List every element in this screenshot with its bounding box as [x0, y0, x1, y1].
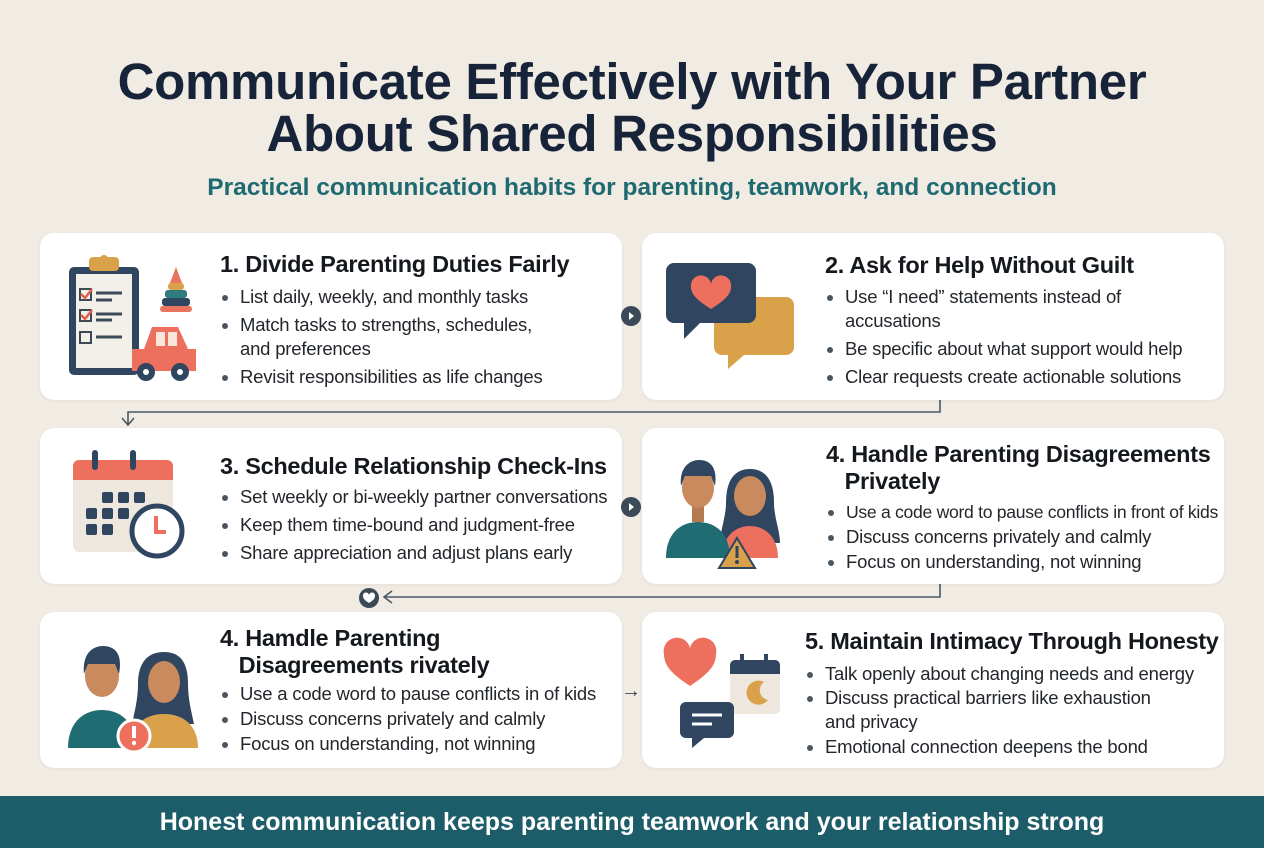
arrow: to panel 5: → — [621, 680, 641, 702]
heading: 2. Ask for Help Without Guilt — [825, 252, 1134, 278]
subtitle: Practical communication habits for parenting, teamwork, and connection — [207, 174, 1057, 201]
icon: heart connector — [359, 588, 379, 608]
panel: 5 intimacy — [642, 612, 1224, 768]
bullets: Use a code word to pause conflicts in of kids — [240, 683, 596, 704]
bullets: and preferences — [240, 338, 371, 359]
bullets: Use “I need” statements instead of — [845, 286, 1121, 307]
bullets: accusations — [845, 310, 940, 331]
icon: speech bubbles — [666, 263, 794, 369]
bullets: Focus on understanding, not winning — [240, 733, 535, 754]
icon: heart, calendar moon, chat — [664, 638, 780, 748]
panel: 2 ask for help — [642, 233, 1224, 400]
bullets — [828, 502, 1218, 572]
bullets: Share appreciation and adjust plans early — [240, 542, 572, 563]
bullets: Keep them time-bound and judgment-free — [240, 514, 575, 535]
bullets: Revisit responsibilities as life changes — [240, 366, 543, 387]
heading: 4. Hamdle Parenting — [220, 625, 440, 651]
bullets: Discuss practical barriers like exhaustion — [825, 687, 1151, 708]
panel: 4 disagreements privately — [642, 428, 1224, 584]
bullets — [827, 286, 1182, 387]
title — [118, 53, 1146, 162]
bullets: Use a code word to pause conflicts in front of kids — [846, 502, 1218, 522]
bullets: and privacy — [825, 711, 917, 732]
bullets — [807, 663, 1194, 757]
title: About Shared Responsibilities — [267, 105, 997, 162]
heading: 3. Schedule Relationship Check-Ins — [220, 453, 607, 479]
heading: 1. Divide Parenting Duties Fairly — [220, 251, 569, 277]
heading: 4. Handle Parenting Disagreements — [826, 441, 1211, 467]
panel: 1 divide duties — [40, 233, 622, 400]
bullets: Set weekly or bi-weekly partner conversations — [240, 486, 607, 507]
icon: clipboard and toys — [69, 255, 196, 381]
heading — [220, 625, 490, 678]
bullets — [222, 486, 607, 563]
bullets: Be specific about what support would help — [845, 338, 1182, 359]
footer banner: Honest communication keeps parenting teamwork and your relationship strong — [160, 808, 1104, 836]
bullets: Discuss concerns privately and calmly — [846, 526, 1151, 547]
bullets: Emotional connection deepens the bond — [825, 736, 1148, 757]
bullets: Focus on understanding, not winning — [846, 551, 1141, 572]
bullets: Discuss concerns privately and calmly — [240, 708, 545, 729]
footer banner — [0, 796, 1264, 848]
icon: calendar with clock — [73, 450, 184, 558]
arrow: 1 to 2 — [621, 306, 641, 326]
bullets — [222, 286, 543, 387]
bullets: Clear requests create actionable solutions — [845, 366, 1181, 387]
bullets — [222, 683, 596, 754]
icon: couple with alert — [68, 646, 198, 750]
bullets: List daily, weekly, and monthly tasks — [240, 286, 528, 307]
heading: Privately — [845, 468, 940, 494]
arrow: 3 to 4 — [621, 497, 641, 517]
bullets: Match tasks to strengths, schedules, — [240, 314, 532, 335]
panel: 4b disagreements (duplicate) — [40, 612, 622, 768]
heading: Disagreements rivately — [239, 652, 489, 678]
icon: couple with warning — [666, 460, 780, 569]
heading — [826, 441, 1211, 494]
title: Communicate Effectively with Your Partner — [118, 53, 1146, 110]
heading: 5. Maintain Intimacy Through Honesty — [805, 628, 1219, 654]
bullets: Talk openly about changing needs and energy — [825, 663, 1194, 684]
panel: 3 check-ins — [40, 428, 622, 584]
